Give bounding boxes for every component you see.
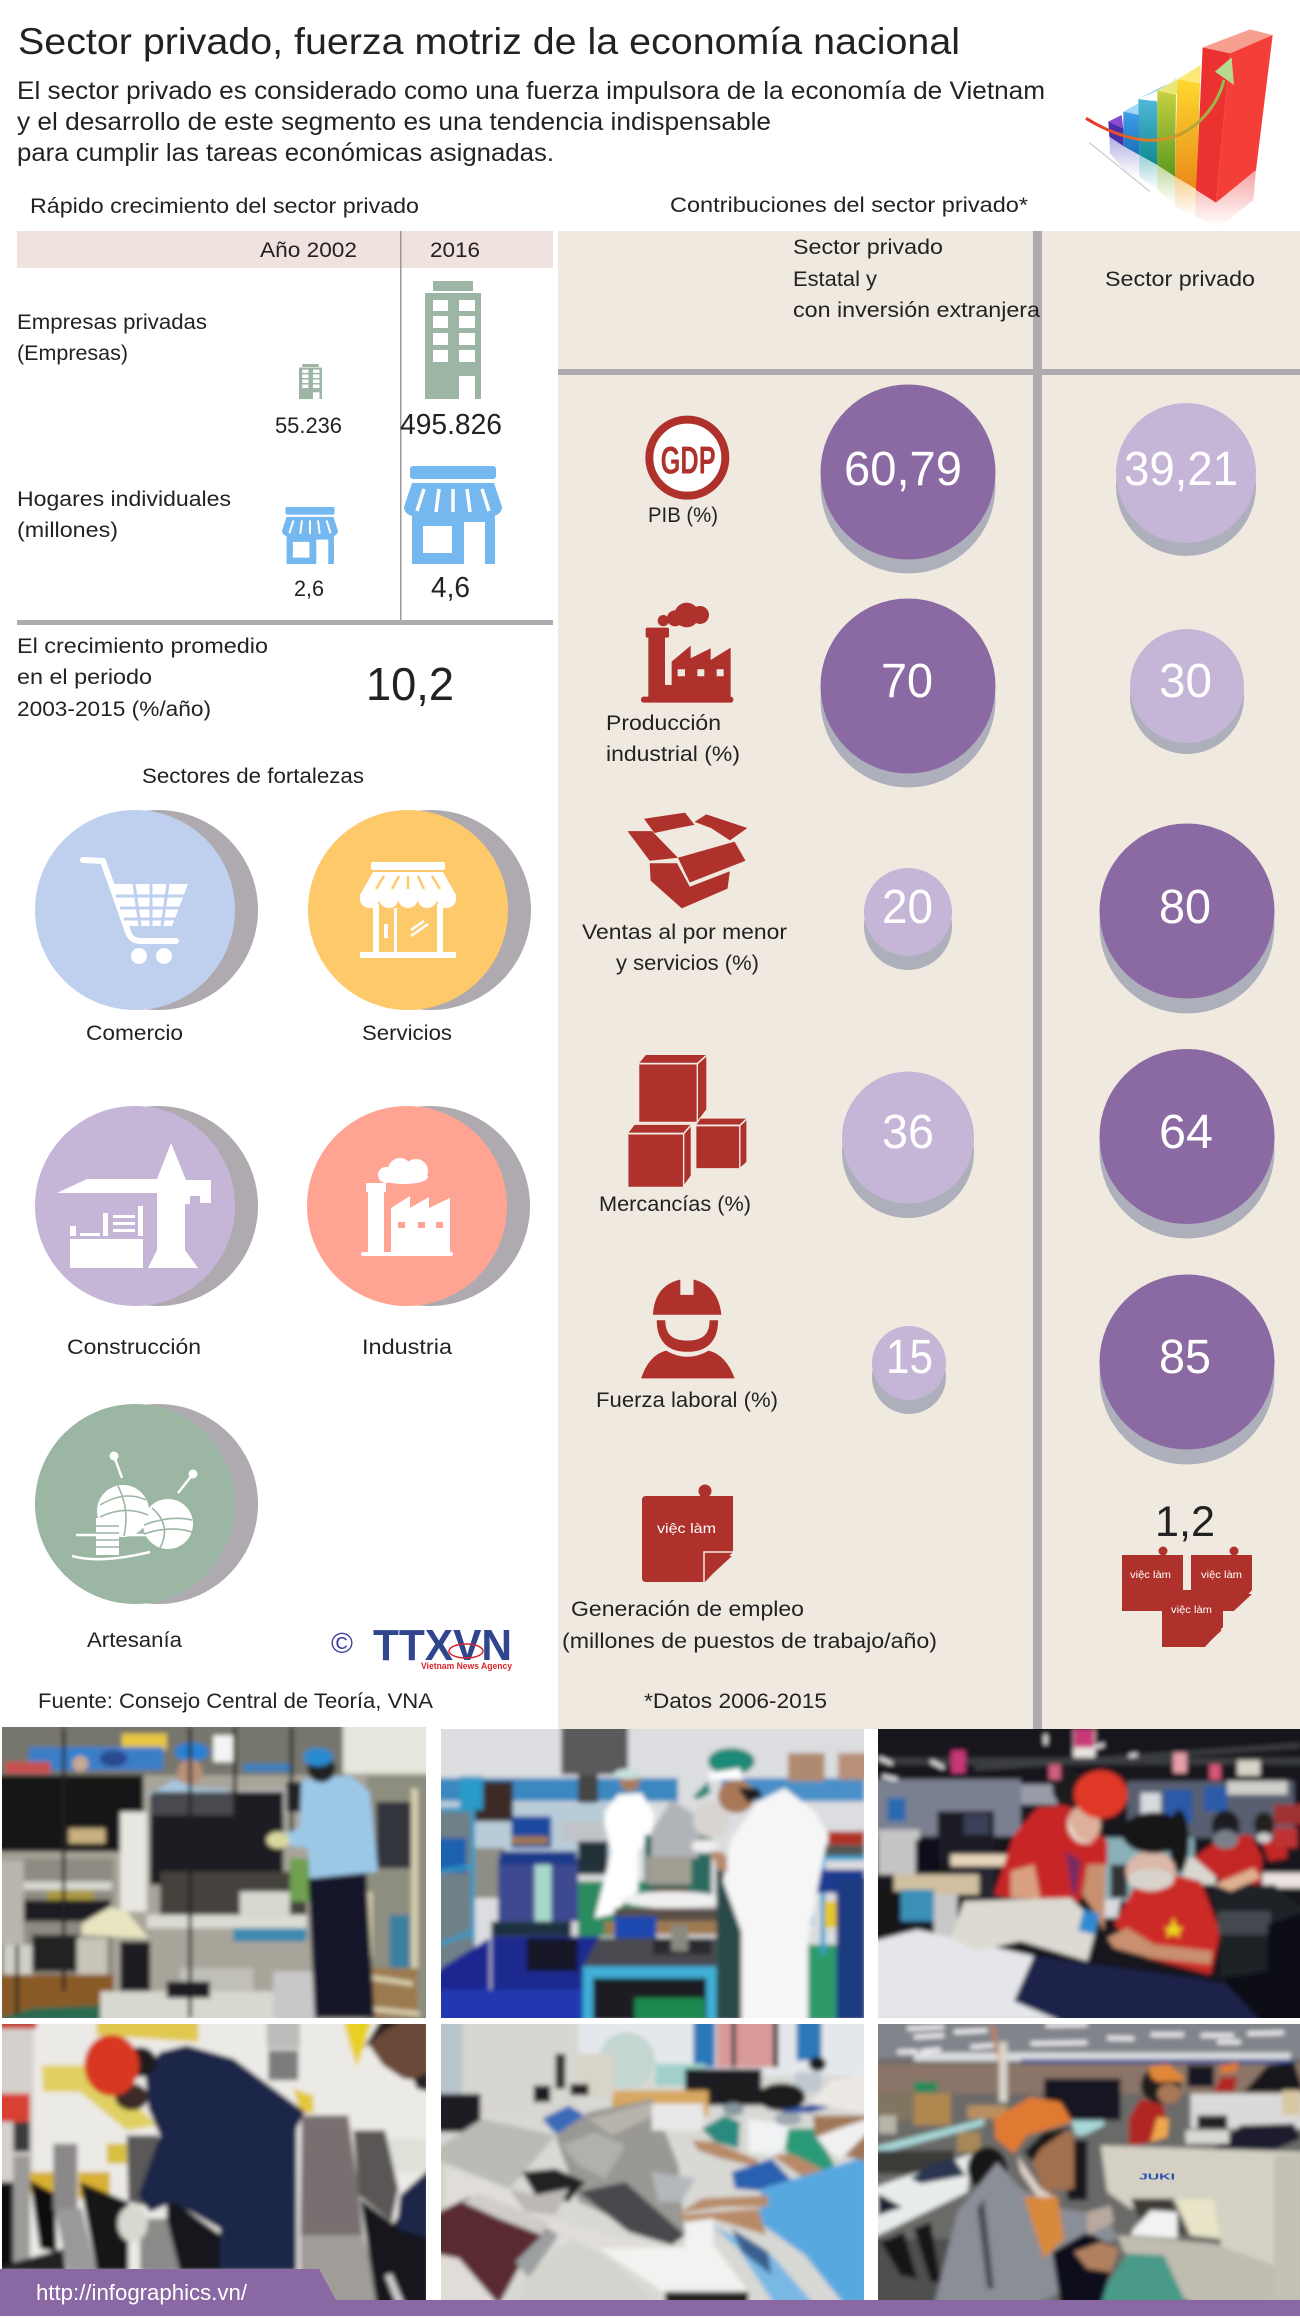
icon: growth bar chart [1085, 29, 1273, 222]
sector: services: Servicios [362, 1021, 452, 1045]
value 1,2: 1,2 [1155, 1498, 1215, 1546]
intro text [17, 77, 1045, 167]
row: labor force [596, 1274, 1274, 1464]
average growth label: en el periodo [17, 665, 152, 689]
row: retail and services: Ventas al por menor [582, 921, 787, 944]
intro text: para cumplir las tareas económicas asignadas. [17, 139, 554, 167]
icon: open box [627, 813, 747, 908]
average growth label [17, 634, 268, 721]
row: job creation [562, 1484, 1252, 1653]
icon: small shop [282, 507, 338, 564]
icon: three job notes [1122, 1546, 1252, 1647]
column head: private sector: Sector privado [1105, 268, 1255, 291]
column head: state and foreign: Estatal y [793, 268, 878, 291]
footer url: http://infographics.vn/ [36, 2280, 248, 2305]
icon: job note: việc làm [657, 1520, 716, 1536]
row: job creation: Generación de empleo [571, 1598, 804, 1621]
table header band [17, 231, 553, 268]
panel: strength sectors [35, 764, 531, 1652]
row label: companies: (Empresas) [17, 341, 128, 365]
heading: strength sectors: Sectores de fortalezas [142, 764, 364, 788]
sector: construction [35, 1106, 258, 1359]
icon: large building [425, 281, 481, 399]
icon: job note [642, 1484, 733, 1582]
row: retail and services: 20 [882, 881, 933, 934]
sector: commerce [35, 810, 258, 1045]
panel: rapid growth table [17, 194, 553, 721]
heading: rapid growth: Rápido crecimiento del sector privado [30, 194, 419, 218]
row: GDP: 39,21 [1124, 443, 1238, 496]
row label: households: Hogares individuales [17, 487, 231, 511]
row: industrial production: Producción [606, 712, 721, 735]
value 10,2: 10,2 [366, 658, 454, 710]
row label: households [17, 487, 231, 542]
row: industrial production: industrial (%) [606, 743, 740, 766]
average growth label: El crecimiento promedio [17, 634, 268, 658]
copyright mark: © [331, 1628, 353, 1660]
row: goods: 64 [1159, 1106, 1213, 1159]
footer bar [0, 2269, 1300, 2316]
heading: contributions: Contribuciones del sector privado* [670, 193, 1029, 217]
title: Sector privado, fuerza motriz de la economía nacional [18, 21, 960, 62]
column head 2002: Año 2002 [260, 239, 357, 262]
row: labor force: 85 [1159, 1331, 1211, 1384]
machine brand label: JUKI [1139, 2171, 1175, 2181]
value 55.236: 55.236 [275, 413, 342, 438]
photo: assembly line workers [2, 1727, 426, 2018]
intro text: El sector privado es considerado como una fuerza impulsora de la economía de Vietnam [17, 77, 1045, 105]
source note: Fuente: Consejo Central de Teoría, VNA [38, 1689, 434, 1713]
row: industrial production: 70 [881, 655, 933, 708]
sector: construction: Construcción [67, 1335, 201, 1359]
row: retail and services: y servicios (%) [616, 952, 759, 975]
sector: commerce: Comercio [86, 1021, 183, 1045]
photo: engine assembly [441, 1729, 864, 2018]
icon: GDP: GDP [661, 438, 716, 482]
logo: TTXVN: TTXVN [373, 1621, 512, 1670]
row: job creation: (millones de puestos de trabajo/año) [562, 1630, 937, 1653]
row: labor force: Fuerza laboral (%) [596, 1389, 778, 1412]
logo: TTXVN: Vietnam News Agency [421, 1661, 513, 1672]
intro text: y el desarrollo de este segmento es una tendencia indispensable [17, 108, 771, 136]
icon: three job notes: việc làm [1171, 1605, 1212, 1616]
value 495.826: 495.826 [400, 409, 502, 441]
icon: GDP [649, 420, 725, 496]
row: GDP: 60,79 [844, 443, 962, 496]
row: GDP: PIB (%) [648, 504, 718, 527]
sector: industry [307, 1106, 530, 1359]
photo: worker in red helmet [2, 2024, 426, 2300]
value 2,6: 2,6 [294, 576, 324, 601]
photo: garment workers in red [878, 1729, 1300, 2018]
row label: companies: Empresas privadas [17, 310, 207, 334]
column head: state and foreign: Sector privado [793, 236, 943, 259]
sector: services [308, 810, 531, 1045]
icon: small building [299, 364, 322, 399]
icon: factory [641, 603, 733, 703]
row: GDP [648, 384, 1256, 574]
row: goods: 36 [882, 1106, 934, 1159]
icon: large shop [404, 466, 502, 564]
column head 2016: 2016 [430, 239, 480, 262]
row: retail and services: 80 [1159, 881, 1211, 934]
row label: households: (millones) [17, 518, 118, 542]
sector: industry: Industria [362, 1335, 452, 1359]
icon: three job notes: việc làm [1201, 1570, 1242, 1581]
panel: contributions [558, 231, 1300, 1729]
photo: sewing line [441, 2024, 864, 2300]
row: retail and services [582, 813, 1274, 1014]
column head: state and foreign [793, 236, 1040, 322]
row: industrial production: 30 [1159, 655, 1212, 708]
sector: handicraft [35, 1404, 258, 1652]
average growth label: 2003-2015 (%/año) [17, 697, 211, 721]
column head: state and foreign: con inversión extranjera [793, 299, 1040, 322]
row: goods [599, 1049, 1274, 1238]
row: goods: Mercancías (%) [599, 1193, 751, 1216]
icon: three job notes: việc làm [1130, 1570, 1171, 1581]
icon: worker [641, 1279, 735, 1378]
sector: handicraft: Artesanía [87, 1628, 182, 1652]
row label: companies [17, 310, 207, 365]
photo: woman at sewing machine [878, 2024, 1300, 2300]
icon: cubes [628, 1055, 746, 1187]
row: labor force: 15 [886, 1331, 933, 1384]
row: industrial production [606, 598, 1244, 788]
data note: *Datos 2006-2015 [644, 1690, 827, 1713]
value 4,6: 4,6 [431, 572, 470, 604]
